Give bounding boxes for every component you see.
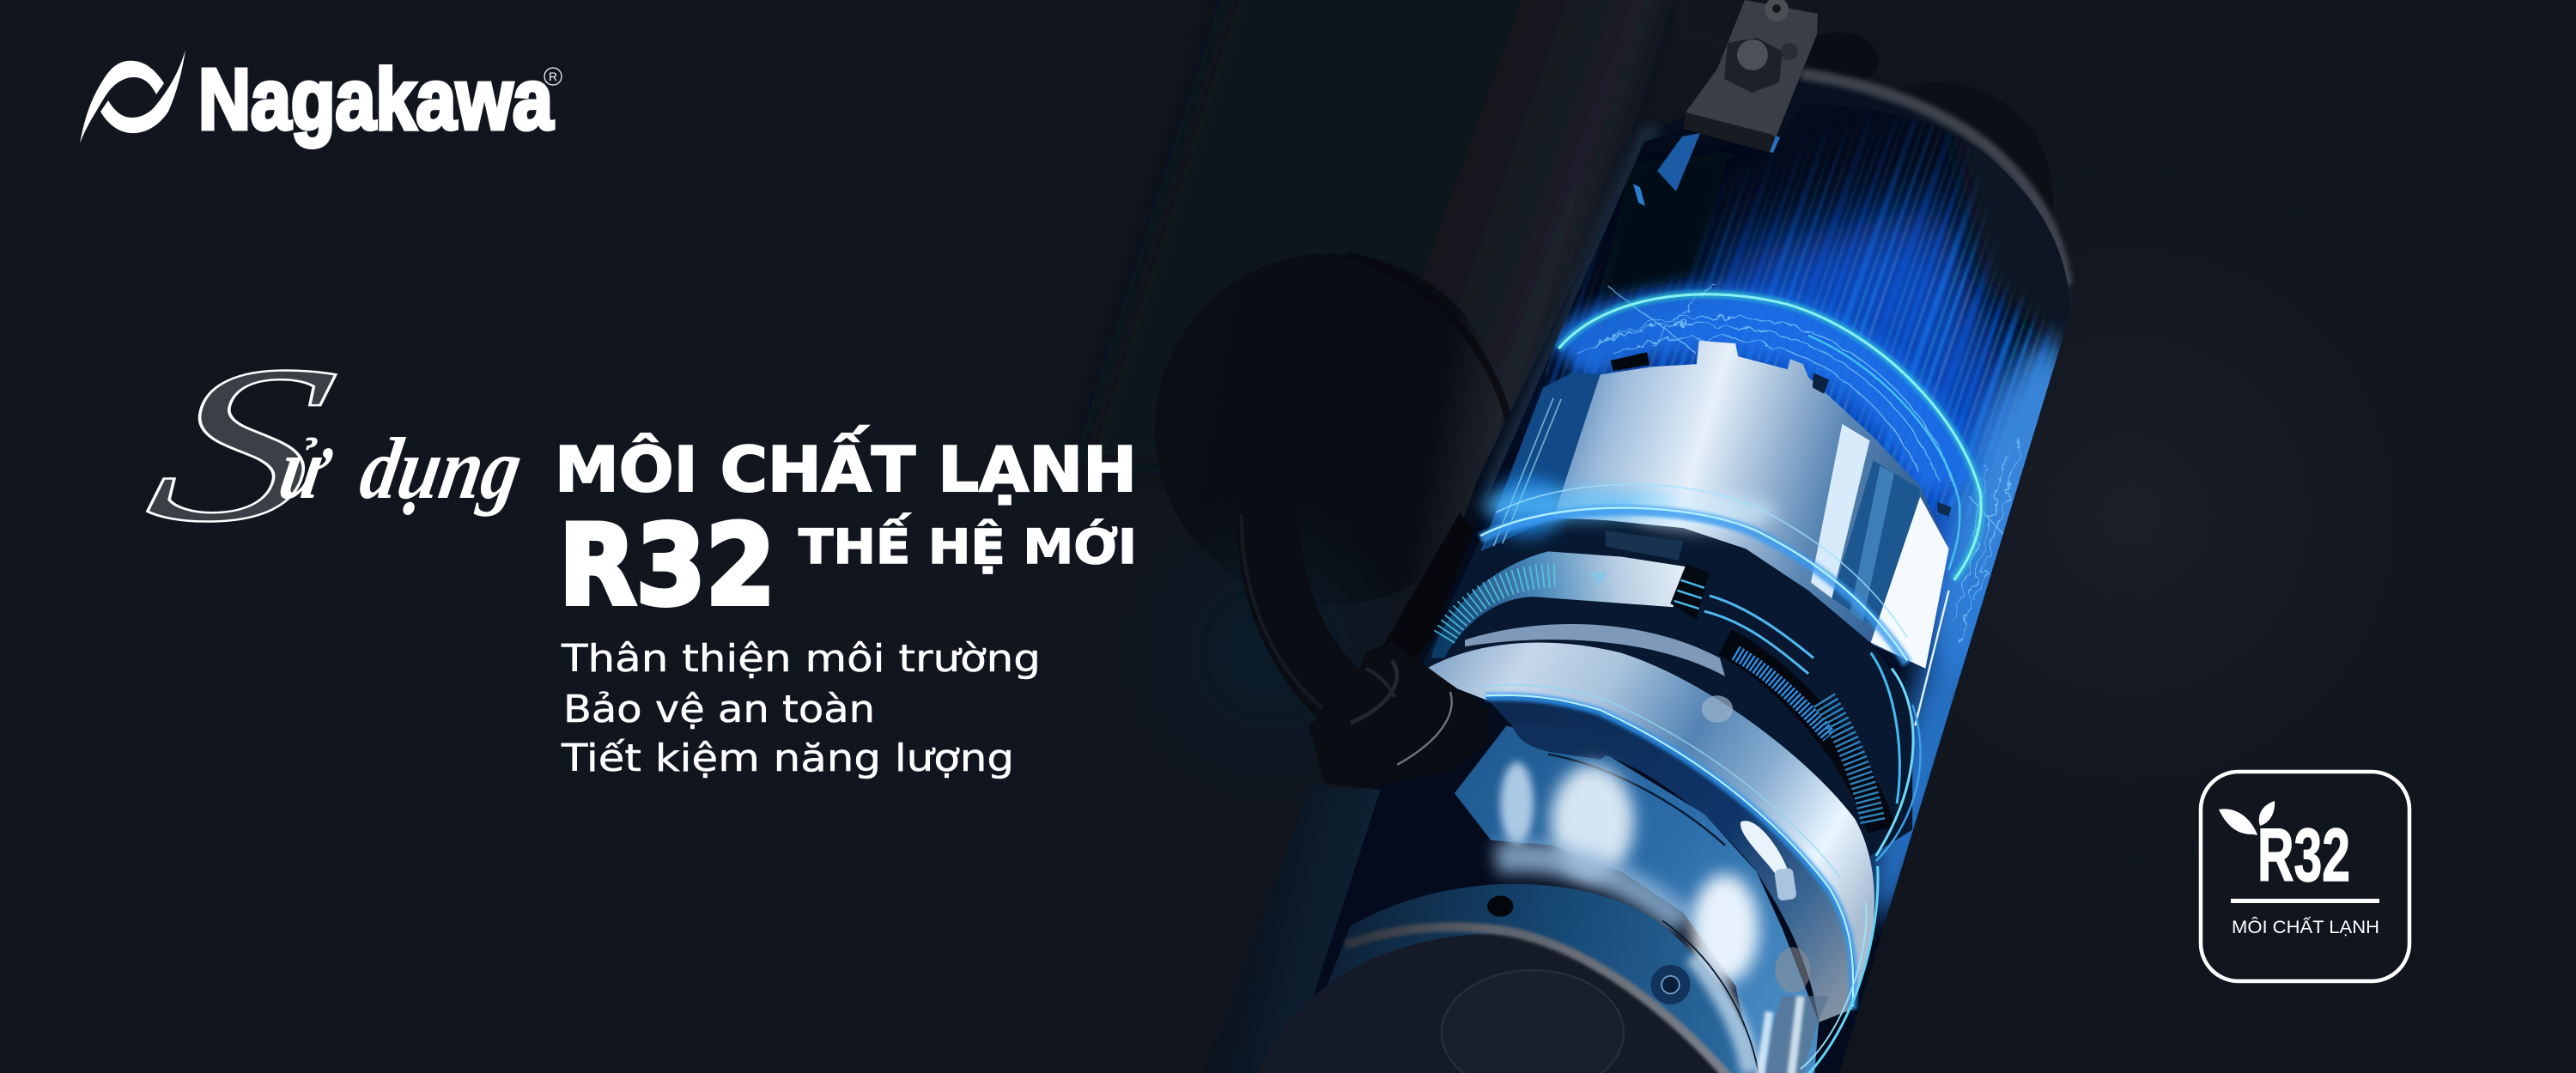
large silver ring <box>1419 643 1874 1007</box>
inner silver collar <box>1465 624 1725 676</box>
rear tank cylinder <box>1082 0 1692 815</box>
benefits list: Bảo vệ an toàn <box>563 688 875 731</box>
headline: R32: R32 <box>559 502 775 630</box>
mounting bracket and bolts <box>1679 0 1818 153</box>
registered mark: R <box>549 70 557 83</box>
script heading: Sử dụng: ử <box>273 420 339 518</box>
metal hull lower left <box>1200 786 1652 1073</box>
badge divider <box>2231 899 2379 903</box>
script heading: Sử dụng <box>130 319 529 568</box>
logo wordmark: Nagakawa <box>198 52 554 148</box>
bottom end cap <box>1252 927 1735 1073</box>
script heading: Sử dụng: S <box>130 319 355 568</box>
lower dark stack <box>1419 520 1912 856</box>
R32 refrigerant badge <box>2201 772 2409 981</box>
benefits list: Thân thiện môi trường <box>561 637 1041 681</box>
dome bumps behind the shell <box>1796 33 2053 258</box>
cutaway interior with blue flow <box>1313 110 2070 997</box>
icon: leaves <box>2219 801 2275 835</box>
headline: THẾ HỆ MỚI: THẾ HỆ MỚI <box>799 512 1137 574</box>
ring edge glow <box>1480 685 1853 1009</box>
gear teeth strip <box>1725 642 1921 861</box>
electric field rings <box>1558 283 2021 642</box>
cyan motion arcs <box>1480 484 1907 664</box>
badge caption: MÔI CHẤT LẠNH <box>2232 918 2379 937</box>
compressor shell <box>1288 74 2073 1073</box>
pipe collar <box>1309 641 1488 788</box>
support strut behind collar <box>1379 512 1491 669</box>
logo: Nagakawa <box>80 50 562 148</box>
benefits list: Tiết kiệm năng lượng <box>561 737 1014 780</box>
right side ring sliver and glints <box>1759 866 1878 1073</box>
logo swoosh mark <box>80 50 185 143</box>
script heading: Sử dụng: dụng <box>354 420 529 517</box>
gauge ring with tick marks <box>1431 530 1814 674</box>
headline: MÔI CHẤT LẠNH: MÔI CHẤT LẠNH <box>555 426 1137 506</box>
motor stator <box>1480 341 1952 725</box>
dark blue band <box>1485 697 1854 1022</box>
lower shoulder and bolts <box>1288 884 1761 1073</box>
motor housing body <box>1455 695 1819 1073</box>
benefits list <box>561 637 1041 780</box>
badge R32: R32 <box>2257 814 2350 897</box>
registered mark <box>544 68 562 85</box>
refrigerant pipe <box>1242 464 1365 717</box>
